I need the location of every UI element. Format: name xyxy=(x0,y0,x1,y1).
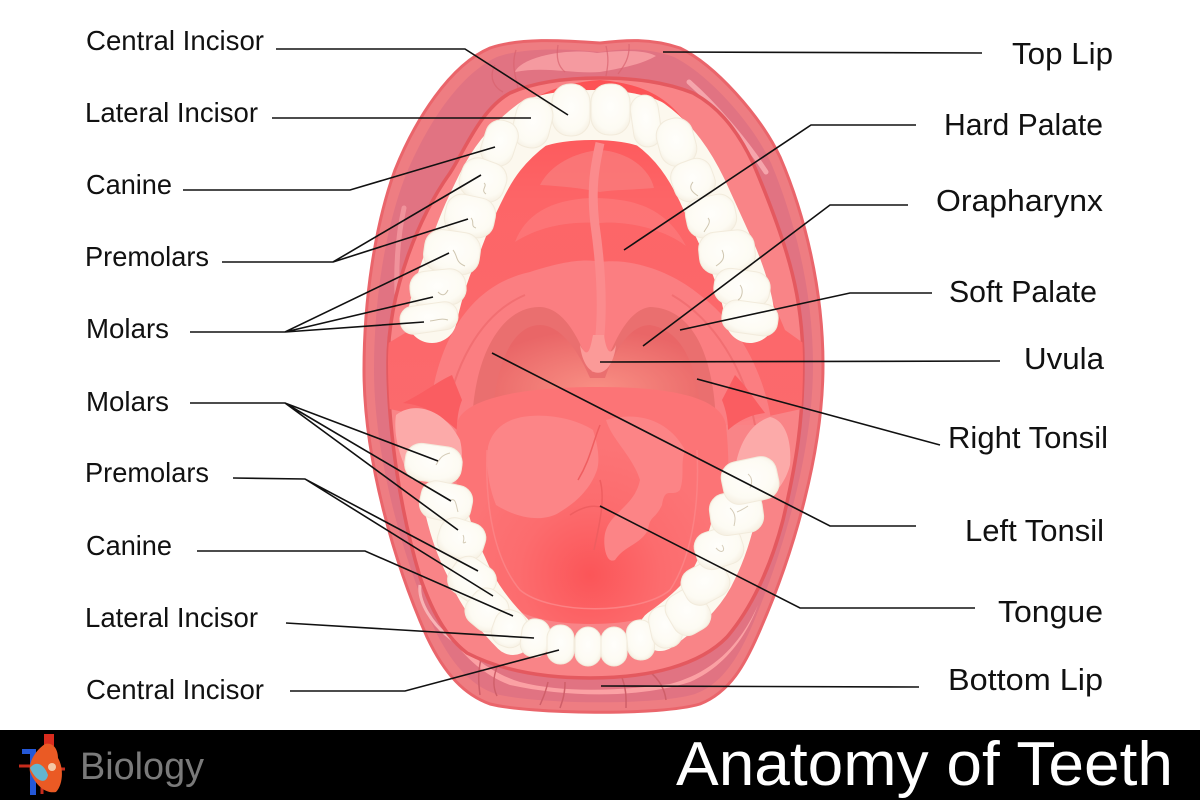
left labels: Molars xyxy=(86,313,169,344)
right labels: Top Lip xyxy=(1012,36,1113,71)
left labels xyxy=(85,25,264,705)
left labels: Canine xyxy=(86,530,172,561)
leader lines xyxy=(183,49,1000,691)
top lip highlight xyxy=(515,51,656,72)
soft palate xyxy=(428,260,772,425)
lips outer xyxy=(364,41,823,712)
raphe and uvula xyxy=(593,143,601,368)
lip creases xyxy=(492,44,629,92)
oral cavity xyxy=(385,78,806,678)
tongue xyxy=(456,387,728,624)
title: Anatomy of Teeth xyxy=(676,730,1173,799)
left labels: Central Incisor xyxy=(86,25,264,56)
upper teeth backing xyxy=(432,115,750,318)
lower teeth backing xyxy=(446,510,736,634)
left labels: Lateral Incisor xyxy=(85,602,258,633)
left labels: Premolars xyxy=(85,241,209,272)
right labels: Bottom Lip xyxy=(948,662,1103,697)
molar gum patches xyxy=(395,408,790,503)
right labels: Right Tonsil xyxy=(948,420,1108,455)
right labels xyxy=(936,36,1113,697)
biology label: Biology xyxy=(80,746,204,788)
bottom lip creases xyxy=(479,655,666,708)
bottom lip highlight xyxy=(425,590,758,694)
lower teeth xyxy=(403,441,782,666)
pillar shading xyxy=(445,295,755,425)
right labels: Uvula xyxy=(1024,341,1105,376)
footer bar xyxy=(0,730,1200,800)
left labels: Premolars xyxy=(85,457,209,488)
right labels: Orapharynx xyxy=(936,183,1104,218)
left labels: Central Incisor xyxy=(86,674,264,705)
right labels: Hard Palate xyxy=(944,107,1103,142)
upper teeth xyxy=(398,84,780,338)
tongue ring xyxy=(487,450,698,609)
tonsil arches xyxy=(473,307,715,408)
left labels: Lateral Incisor xyxy=(85,97,258,128)
back throat xyxy=(403,375,462,430)
icon: heart xyxy=(19,734,65,795)
palate xyxy=(385,80,806,425)
right labels: Soft Palate xyxy=(949,274,1097,309)
left labels: Molars xyxy=(86,386,169,417)
palate ridges xyxy=(540,150,654,192)
mouth illustration xyxy=(364,41,823,712)
tongue light patches xyxy=(487,416,598,518)
right labels: Tongue xyxy=(998,594,1103,629)
left labels: Canine xyxy=(86,169,172,200)
right labels: Left Tonsil xyxy=(965,513,1104,548)
